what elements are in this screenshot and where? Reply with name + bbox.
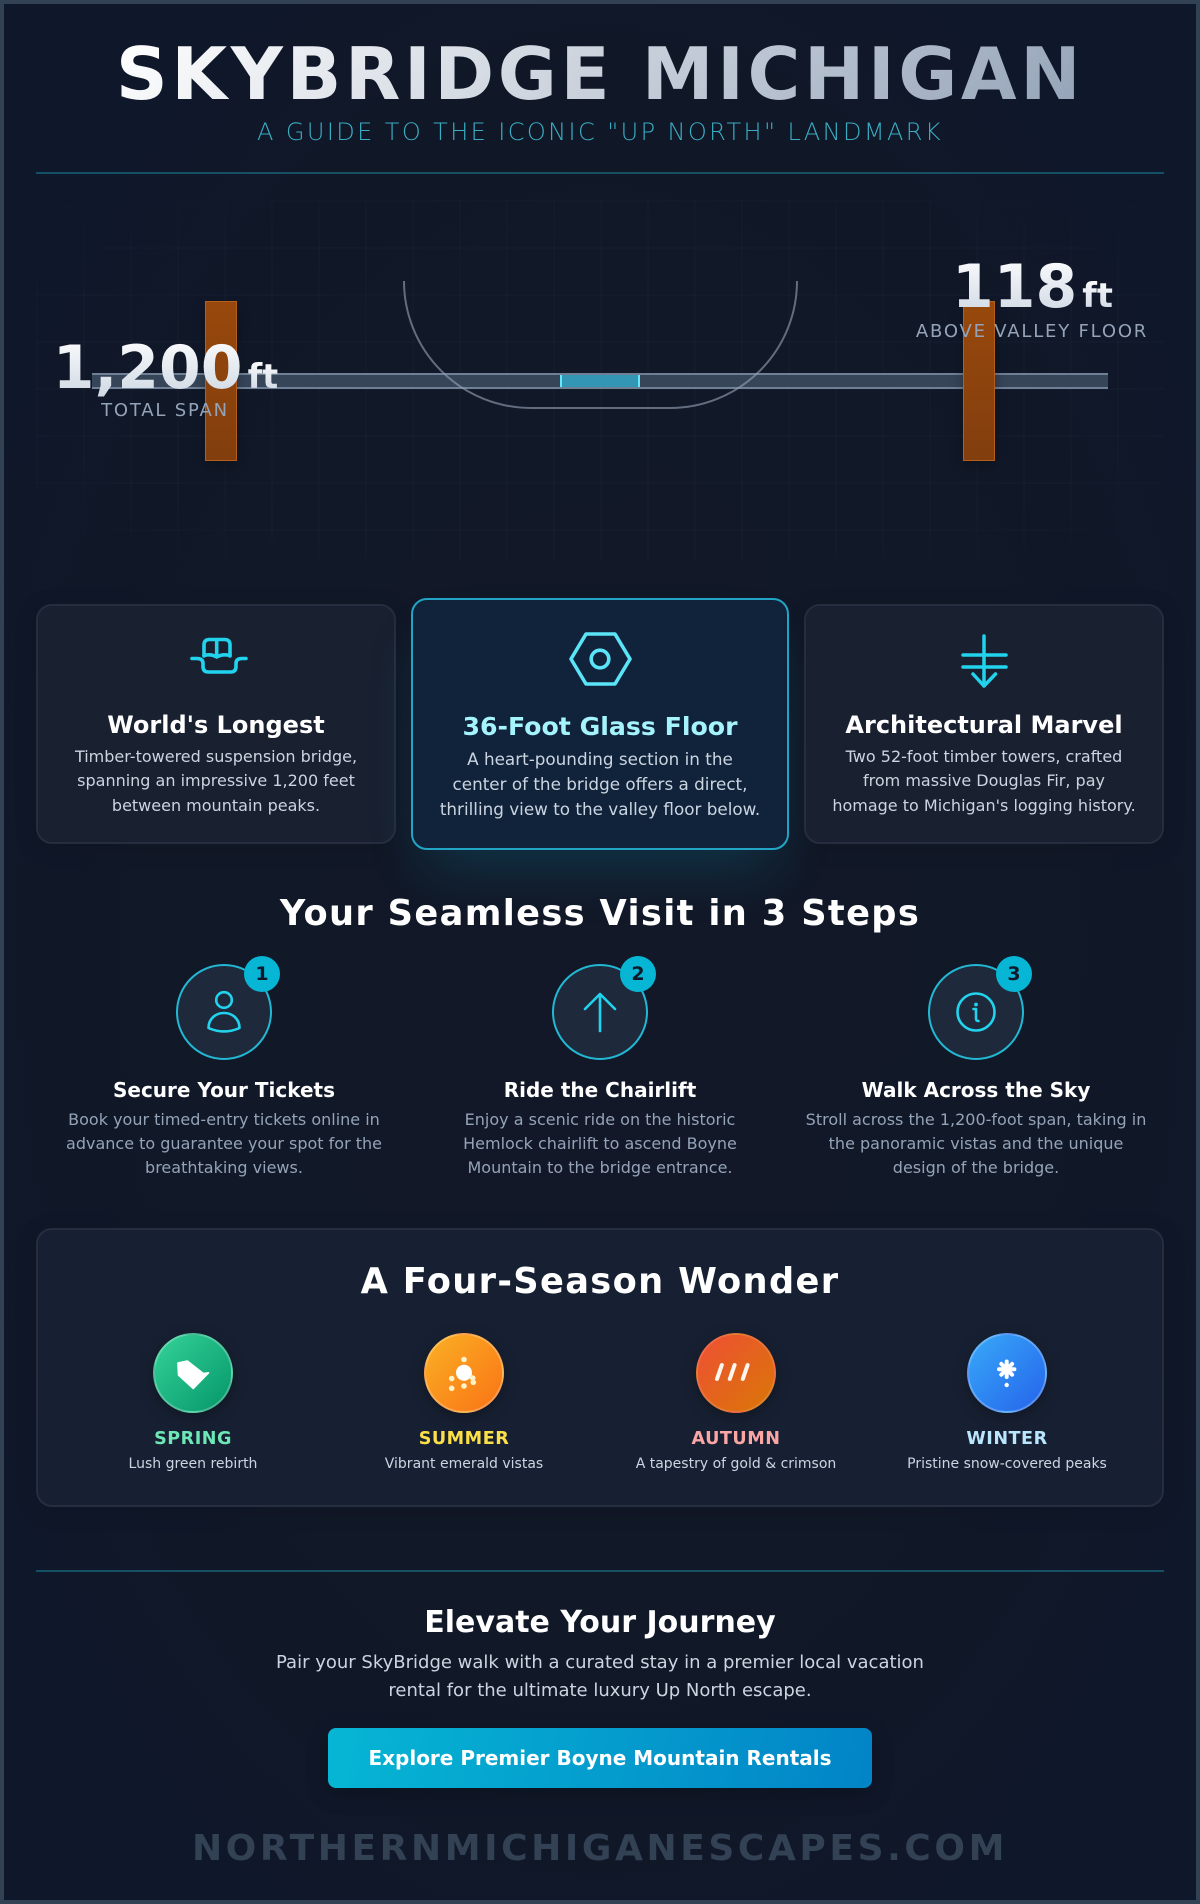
icon: timber tower [961,634,1008,688]
heading: steps: Your Seamless Visit in 3 Steps [280,893,920,934]
stat: total span: 1,200ft [53,333,278,403]
stat: total span: TOTAL SPAN [101,400,229,421]
glass floor section [560,375,640,387]
heading: Architectural Marvel [845,711,1123,739]
step 3 [806,956,1146,1177]
season: spring [129,1333,257,1472]
step description: Book your timed-entry tickets online in [68,1110,380,1129]
badge 2 [620,956,656,992]
panel: four seasons [36,1228,1164,1507]
caption: Lush green rebirth [129,1456,257,1472]
icon circle [696,1333,776,1413]
icon circle: info [928,964,1024,1060]
left timber tower [205,301,237,461]
heading: 36-Foot Glass Floor [462,712,738,741]
description: between mountain peaks. [112,796,320,815]
description: thrilling view to the valley floor below. [440,799,760,819]
badge 3 [996,956,1032,992]
icon circle [967,1333,1047,1413]
description: spanning an impressive 1,200 feet [77,771,355,790]
icon: hexagon lens [569,632,632,686]
step 2 [463,956,737,1177]
description: center of the bridge offers a direct, [453,774,747,794]
description: from massive Douglas Fir, pay [863,771,1105,790]
icon circle [153,1333,233,1413]
description: Two 52-foot timber towers, crafted [846,747,1122,766]
panel: bridge diagram [36,200,1164,560]
description [832,747,1136,815]
icon circle: person [176,964,272,1060]
badge 2: 2 [631,963,645,985]
icon: snowflake [997,1360,1016,1388]
stat: height above valley [916,252,1148,342]
icon: falling leaves [714,1363,750,1381]
step description: advance to guarantee your spot for the [66,1134,382,1153]
season: summer [384,1333,543,1472]
panel: glass floor (highlighted) [411,598,789,850]
label: AUTUMN [692,1429,780,1449]
step 1 [66,956,382,1177]
stat: height above valley: ABOVE VALLEY FLOOR [916,321,1148,342]
caption: Pristine snow-covered peaks [907,1456,1107,1472]
icon circle [424,1333,504,1413]
icon: sun [448,1356,476,1392]
caption: A tapestry of gold & crimson [636,1456,836,1472]
label: SUMMER [419,1429,509,1449]
body text: Pair your SkyBridge walk with a curated stay in a premier local vacation [276,1652,924,1672]
suspension cable [403,281,798,409]
step title: Walk Across the Sky [862,1078,1090,1102]
icon: bridge [190,638,248,674]
bridge deck [92,373,1108,389]
icon: person [207,990,241,1033]
step description: Mountain to the bridge entrance. [467,1158,733,1177]
panel: architectural marvel [804,604,1164,844]
panel: world's longest [36,604,396,844]
header [116,32,1084,146]
button [328,1728,872,1788]
season: autumn [636,1333,836,1472]
footer watermark: NORTHERNMICHIGANESCAPES.COM [192,1828,1008,1869]
icon: leaf tag [177,1360,210,1390]
step title: Ride the Chairlift [504,1078,696,1102]
icon: info [956,992,996,1032]
heading: World's Longest [107,711,325,739]
badge 1 [244,956,280,992]
right timber tower [963,301,995,461]
step description: design of the bridge. [893,1158,1059,1177]
caption: Vibrant emerald vistas [385,1456,543,1472]
step description [806,1110,1146,1177]
step description: the panoramic vistas and the unique [829,1134,1123,1153]
icon circle: arrow [552,964,648,1060]
title: SKYBRIDGE MICHIGAN [116,32,1084,116]
description [440,748,760,819]
body text: rental for the ultimate luxury Up North escape. [388,1680,812,1701]
description [74,747,357,815]
badge 1: 1 [255,963,269,985]
badge 3: 3 [1007,963,1021,985]
stat: height above valley: 118ft [952,252,1113,322]
step description: Enjoy a scenic ride on the historic [465,1110,735,1129]
description: homage to Michigan's logging history. [832,796,1136,815]
call to action [276,1605,924,1788]
label: SPRING [154,1429,232,1449]
heading: A Four-Season Wonder [361,1261,839,1302]
step description [66,1110,382,1177]
step description: breathtaking views. [145,1158,303,1177]
season: winter [907,1333,1107,1472]
step description: Hemlock chairlift to ascend Boyne [463,1134,737,1153]
heading: Elevate Your Journey [424,1605,776,1640]
label: WINTER [966,1429,1048,1449]
subtitle: A GUIDE TO THE ICONIC "UP NORTH" LANDMARK [257,118,943,146]
description: A heart-pounding section in the [467,748,733,768]
step description [463,1110,737,1177]
icon: up arrow [584,992,616,1032]
body text [276,1652,924,1701]
description: Timber-towered suspension bridge, [75,747,357,766]
step title: Secure Your Tickets [113,1078,335,1102]
step description: Stroll across the 1,200-foot span, taking in [806,1110,1146,1129]
button: Explore Premier Boyne Mountain Rentals [368,1746,832,1770]
